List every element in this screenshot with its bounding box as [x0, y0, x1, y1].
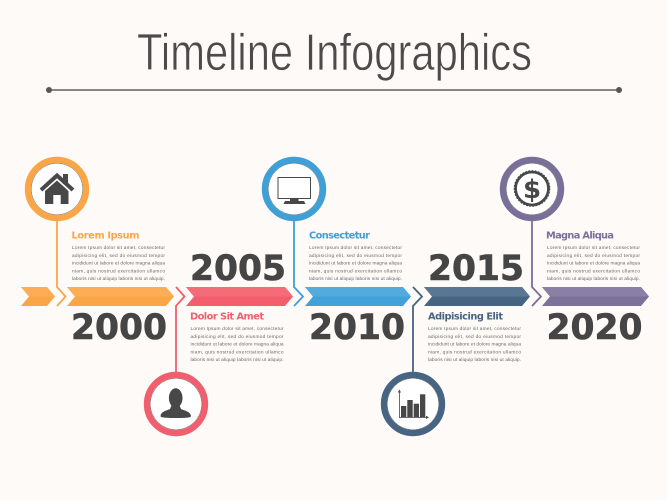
- arrow: 2015: [424, 287, 530, 306]
- text block: Consectetur: Lorem Ipsum dolor sit amet, consectetur: [309, 245, 402, 251]
- arrow: 2010: [305, 287, 411, 306]
- text block: Adipisicing Elit: Lorem Ipsum dolor sit amet, consectetur: [428, 326, 521, 332]
- text block: Lorem Ipsum: adipisicing elit, sed do eiusmod tempor: [72, 253, 165, 259]
- text block: Lorem Ipsum: Lorem Ipsum dolor sit amet, consectetur: [72, 245, 165, 251]
- year 2015: 2015: [428, 249, 524, 289]
- text block: Magna Aliqua: [547, 245, 640, 282]
- connector: 2000: [57, 215, 66, 306]
- text block: Lorem Ipsum: incididunt ut labore et dolore magna aliqua: [72, 260, 165, 266]
- text block: Dolor Sit Amet: laboris nisi ut aliquip laboris nisi ut aliquip.: [190, 357, 284, 363]
- arrow: 2020: [542, 287, 649, 306]
- text block: Consectetur: incididunt ut labore et dolore magna aliqua: [309, 260, 402, 266]
- heading: Dolor Sit Amet: Dolor Sit Amet: [190, 312, 264, 322]
- text block: Lorem Ipsum: niam, quis nostrud exercitation ullamco: [72, 268, 165, 274]
- icon: bar chart: [384, 375, 442, 433]
- year 2000: 2000: [71, 308, 167, 348]
- text block: Dolor Sit Amet: adipisicing elit, sed do eiusmod tempor: [190, 334, 284, 340]
- text block: Dolor Sit Amet: niam, quis nostrud exercitation ullamco: [190, 350, 284, 356]
- text block: Consectetur: laboris nisi ut aliquip laboris nisi ut aliquip.: [309, 276, 402, 282]
- text block: Magna Aliqua: Lorem Ipsum dolor sit amet, consectetur: [547, 245, 640, 251]
- connector: 2005: [176, 287, 184, 378]
- text block: Magna Aliqua: adipisicing elit, sed do eiusmod tempor: [547, 253, 640, 259]
- text block: Consectetur: [309, 245, 402, 282]
- title: Timeline Infographics: [137, 24, 532, 82]
- heading: Lorem Ipsum: Lorem Ipsum: [72, 230, 140, 242]
- start chevron: [21, 287, 55, 306]
- connector: 2020: [532, 215, 541, 306]
- icon: dollar coin: [503, 160, 561, 218]
- text block: Lorem Ipsum: [72, 245, 165, 282]
- text block: Magna Aliqua: incididunt ut labore et dolore magna aliqua: [547, 260, 640, 266]
- text block: Dolor Sit Amet: Lorem Ipsum dolor sit amet, consectetur: [190, 326, 284, 332]
- text block: Consectetur: niam, quis nostrud exercitation ullamco: [309, 268, 402, 274]
- year 2005: 2005: [190, 249, 286, 289]
- arrow: 2000: [67, 287, 174, 306]
- heading: Adipisicing Elit: Adipisicing Elit: [428, 312, 503, 322]
- text block: Dolor Sit Amet: incididunt ut labore et dolore magna aliqua: [190, 342, 284, 348]
- text block: Magna Aliqua: niam, quis nostrud exercitation ullamco: [547, 268, 640, 274]
- year 2020: 2020: [546, 308, 642, 348]
- icon: monitor: [265, 160, 323, 218]
- title divider: [46, 87, 622, 93]
- heading: Consectetur: Consectetur: [309, 230, 370, 242]
- text block: Lorem Ipsum: laboris nisi ut aliquip laboris nisi ut aliquip.: [72, 276, 165, 282]
- text block: Adipisicing Elit: [428, 326, 521, 363]
- text block: Dolor Sit Amet: [190, 326, 284, 363]
- text block: Adipisicing Elit: laboris nisi ut aliquip laboris nisi ut aliquip.: [428, 357, 521, 363]
- text block: Adipisicing Elit: adipisicing elit, sed do eiusmod tempor: [428, 334, 521, 340]
- text block: Consectetur: adipisicing elit, sed do eiusmod tempor: [309, 253, 402, 259]
- text block: Adipisicing Elit: niam, quis nostrud exercitation ullamco: [428, 350, 521, 356]
- text block: Adipisicing Elit: incididunt ut labore et dolore magna aliqua: [428, 342, 521, 348]
- icon: dollar coin: $: [523, 175, 541, 205]
- icon: person: [147, 375, 205, 433]
- connector: 2010: [294, 215, 303, 306]
- arrow: 2005: [186, 287, 293, 306]
- year 2010: 2010: [309, 308, 405, 348]
- heading: Magna Aliqua: Magna Aliqua: [546, 230, 614, 242]
- text block: Magna Aliqua: laboris nisi ut aliquip laboris nisi ut aliquip.: [547, 276, 640, 282]
- connector: 2015: [413, 287, 422, 378]
- icon: house: [28, 160, 86, 218]
